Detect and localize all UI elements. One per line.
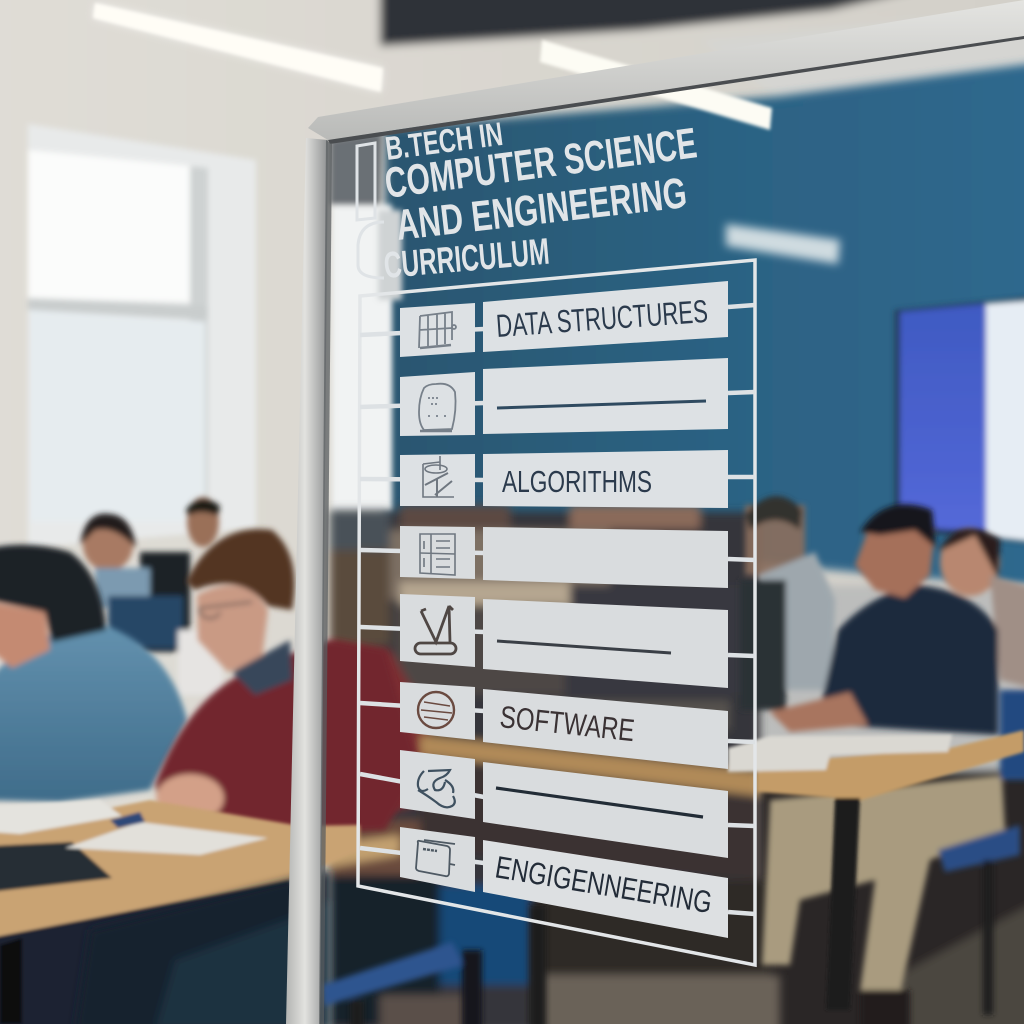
blue chair — [322, 905, 546, 1024]
label: SOFTWARE — [498, 699, 636, 748]
seated man lower body and chair — [75, 870, 330, 1024]
icon: stethoscope loop — [418, 770, 455, 807]
title — [382, 115, 700, 286]
wall screen — [895, 296, 1024, 544]
row 5: unlabeled with rule — [400, 594, 728, 688]
title: COMPUTER SCIENCE — [382, 119, 700, 208]
row 7: unlabeled with rule — [400, 750, 728, 858]
left window — [28, 124, 402, 548]
person: man in maroon sweater — [155, 529, 420, 835]
rule — [497, 401, 706, 408]
icon: chip dome — [419, 384, 456, 431]
room behind the sign — [325, 505, 780, 1024]
ceiling lights — [93, 3, 840, 264]
label: ALGORITHMS — [502, 464, 652, 499]
rule — [497, 641, 671, 653]
title: CURRICULUM — [382, 231, 551, 286]
right table and papers — [728, 730, 1024, 1010]
blue wall — [385, 60, 1024, 590]
icon: data structure grid — [419, 312, 456, 348]
row 4: unlabeled — [400, 526, 728, 588]
row 6: software — [400, 682, 728, 769]
right students — [740, 496, 1024, 1024]
icon: disc — [418, 692, 454, 728]
row 1: data structures — [400, 281, 728, 357]
top rail — [308, 0, 1024, 140]
left table with laptop and papers — [0, 800, 360, 1024]
label: ENGIGENNEERING — [493, 849, 715, 920]
sign outline frame — [358, 260, 755, 965]
etched sign — [357, 115, 755, 965]
label: DATA STRUCTURES — [495, 293, 709, 344]
person: back-left student — [80, 497, 223, 695]
decorative title outlines — [357, 143, 384, 278]
row 8: engineering — [400, 827, 728, 938]
right side floor and lower wall — [757, 585, 1024, 1024]
row 2: unlabeled with rule — [400, 358, 728, 436]
title: AND ENGINEERING — [394, 169, 689, 250]
icon: algorithm flow — [423, 456, 454, 497]
glass frame — [286, 0, 1024, 1024]
title: B.TECH IN — [383, 115, 505, 167]
connector ticks — [360, 305, 755, 914]
row 3: algorithms — [400, 450, 728, 508]
person: woman in blue sweater — [0, 545, 187, 802]
left rail — [286, 138, 328, 1024]
rule — [496, 788, 703, 817]
icon: layout blocks — [420, 534, 455, 575]
icon: device — [416, 840, 455, 876]
icon: compass tool — [415, 606, 456, 654]
